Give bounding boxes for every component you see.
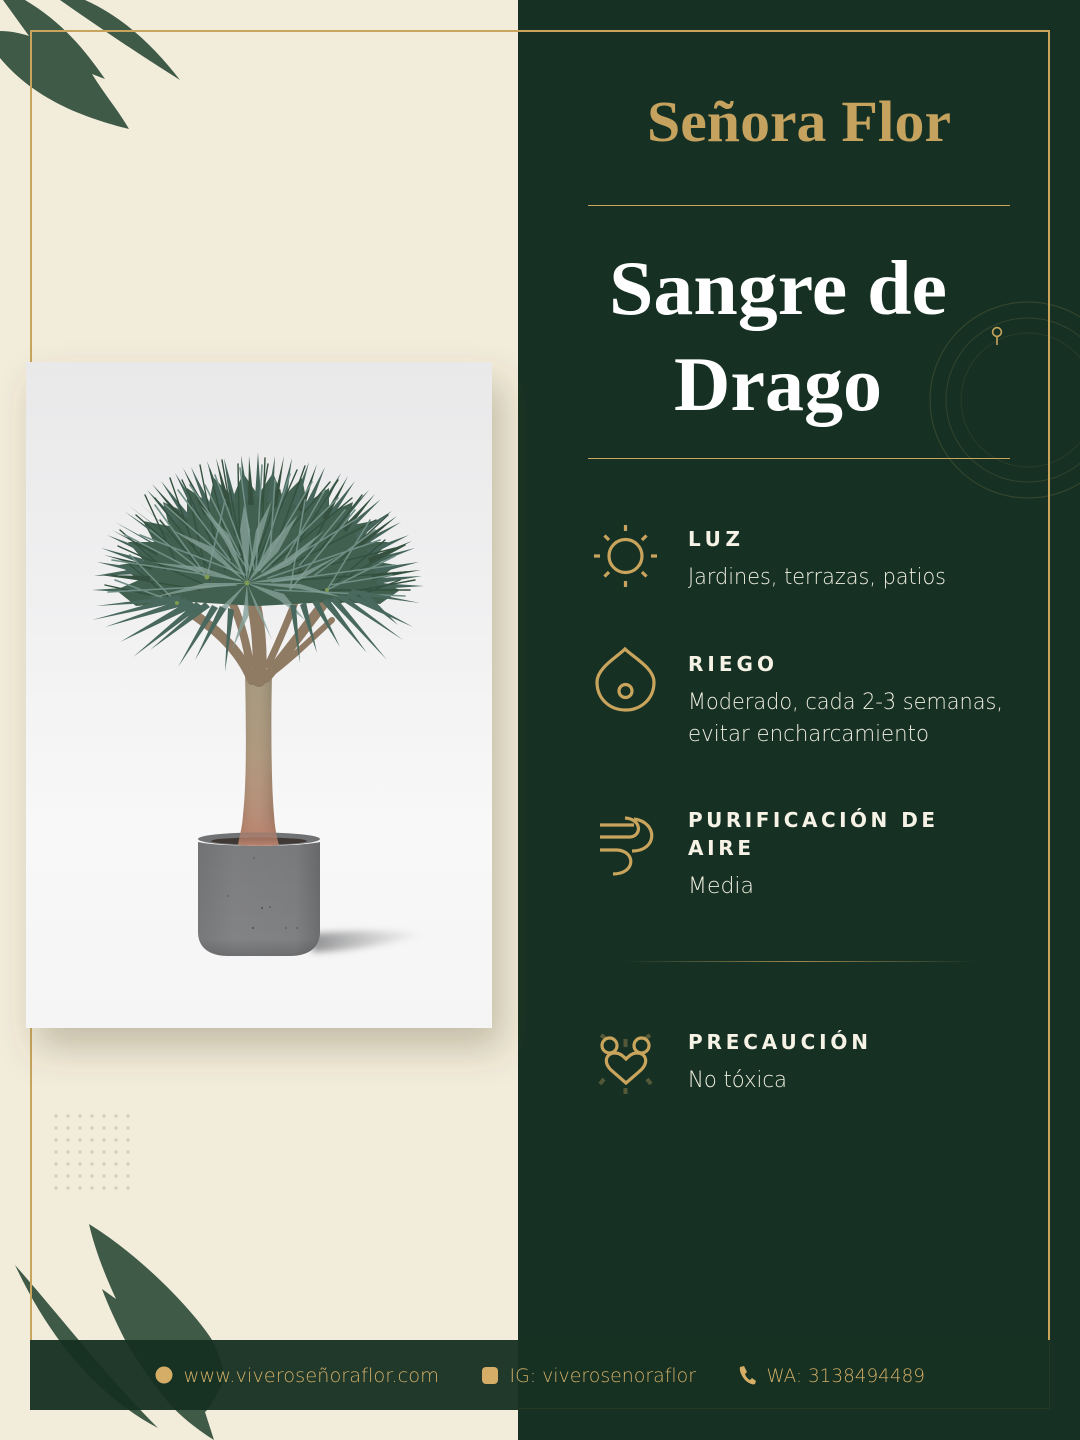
pot (198, 815, 320, 956)
radiating needles (105, 458, 415, 604)
right dark green panel (518, 0, 1080, 1440)
luz text (688, 527, 946, 590)
icon: sun (594, 525, 657, 587)
icon: water drop (597, 649, 654, 710)
icon: small gold pin (993, 328, 1001, 345)
decorative leaves: bottom left (15, 1224, 224, 1440)
precaucion text (688, 1030, 868, 1093)
brand name: Señora Flor (647, 89, 951, 154)
header divider top (588, 205, 1010, 206)
pot body shading (198, 842, 320, 956)
footer: whatsapp: WA: 3138494489 (766, 1366, 925, 1387)
decorative concentric rings (930, 302, 1080, 498)
footer: instagram: IG: viverosenoraflor (510, 1366, 696, 1387)
branches (190, 596, 332, 680)
precaucion text: No tóxica (688, 1067, 787, 1093)
dot pattern (54, 1114, 130, 1190)
mid needles (108, 465, 405, 603)
purificacion text: PURIFICACIÓN DE (688, 808, 935, 832)
light central blades (150, 500, 345, 650)
riego text (688, 652, 1003, 747)
purificacion text: AIRE (688, 836, 751, 860)
trunk base (238, 815, 279, 846)
purificacion text: Media (688, 873, 754, 899)
left cream panel (0, 0, 518, 1440)
plant title: Drago (674, 341, 882, 427)
riego text: RIEGO (688, 652, 774, 676)
footer band (30, 1340, 1050, 1410)
riego text: Moderado, cada 2-3 semanas, (688, 689, 1003, 715)
crown core (116, 473, 400, 606)
trunk (238, 672, 279, 845)
pot speckles (227, 857, 298, 929)
plant photo card (26, 362, 492, 1028)
precaucion text: PRECAUCIÓN (688, 1030, 868, 1054)
plant title (609, 245, 947, 427)
icon: wind (600, 818, 652, 874)
section divider (625, 961, 975, 962)
pot rim (198, 832, 320, 846)
lower hanging blades (92, 589, 420, 672)
soil (211, 838, 307, 844)
decorative leaves: top left (0, 0, 180, 129)
outer needle spikes (92, 452, 424, 593)
header divider bottom (588, 458, 1010, 459)
plant illustration (92, 452, 424, 956)
hub accents (175, 574, 329, 605)
luz text: Jardines, terrazas, patios (688, 564, 946, 590)
footer band right edge (518, 1340, 1050, 1408)
pot body (198, 842, 320, 956)
trunk shading (238, 672, 279, 845)
riego text: evitar encharcamiento (688, 721, 929, 747)
photo background (26, 362, 492, 1028)
icon: heart with circles (600, 1035, 651, 1094)
plant title: Sangre de (609, 245, 947, 331)
purificacion text (688, 808, 935, 899)
interstitial dark spikes (100, 456, 421, 582)
footer: website: www.viveroseñoraflor.com (184, 1366, 439, 1387)
pot cast shadow (312, 931, 428, 952)
luz text: LUZ (688, 527, 740, 551)
